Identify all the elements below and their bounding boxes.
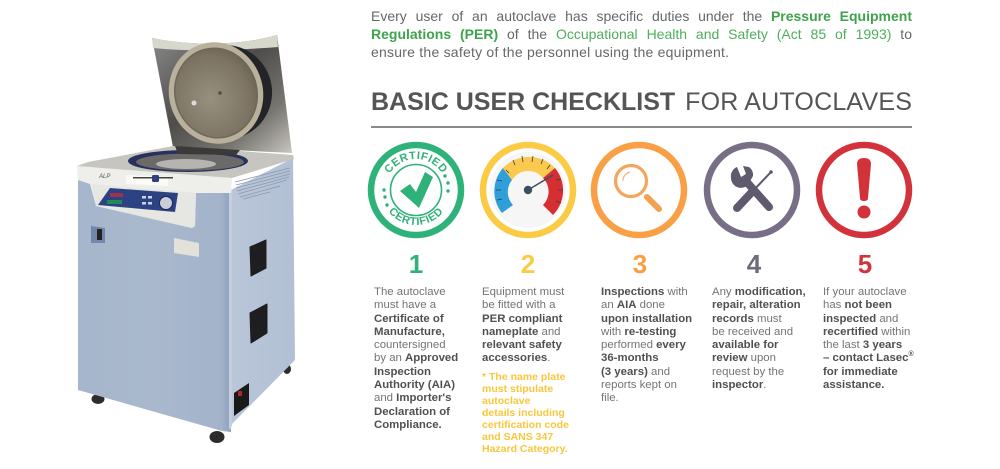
column 2 text: be fitted with a	[482, 299, 555, 311]
autoclave photo illustration	[77, 35, 295, 443]
column 3 text: (3 years) and	[601, 366, 670, 378]
column 3 text: Inspections with	[601, 286, 688, 298]
column 5 text	[823, 286, 914, 391]
deck	[77, 146, 294, 178]
icon: exclamation mark	[819, 145, 909, 235]
column 3 text: file.	[601, 392, 619, 404]
column 1 text: Certificate of	[374, 313, 444, 325]
body side	[231, 158, 295, 425]
column 2 note: * The name plate	[482, 371, 565, 383]
logo: ALP	[98, 174, 110, 180]
column 1 text: countersigned	[374, 339, 446, 351]
column 5 text: has not been	[823, 299, 892, 311]
column 2 note: must stipulate	[482, 383, 553, 395]
column 1 text: The autoclave	[374, 286, 446, 298]
lid gasket	[169, 35, 283, 149]
column 3 text: upon installation	[601, 313, 692, 325]
column 4 text: records must	[712, 313, 782, 325]
column 2 text	[482, 286, 564, 364]
chamber opening	[128, 146, 248, 172]
side vents	[235, 168, 290, 199]
column 2 text: PER compliant	[482, 313, 562, 325]
column 2 note: details including	[482, 407, 565, 419]
column 1 text: Inspection	[374, 366, 431, 378]
heading rule	[371, 126, 912, 128]
power box	[234, 383, 249, 416]
column 3 text: with re-testing	[601, 326, 676, 338]
card slot	[91, 226, 105, 243]
column 5 text: recertified within	[823, 326, 910, 338]
column 5 text: assistance.	[823, 379, 884, 391]
column 1 text: must have a	[374, 299, 436, 311]
icon: certified stamp: CERTIFIED	[385, 151, 446, 172]
intro paragraph: Regulations (PER) of the Occupational Health and Safety (Act 85 of 1993) to	[371, 26, 912, 42]
column 2 text: accessories.	[482, 352, 550, 364]
column 2 note	[482, 371, 569, 455]
intro paragraph: Every user of an autoclave has specific duties under the Pressure Equipment	[371, 8, 912, 24]
column 5 text: If your autoclave	[823, 286, 907, 298]
column 2 note: Hazard Category.	[482, 443, 568, 455]
number 2: 2	[521, 249, 535, 279]
icon: magnifying glass	[594, 145, 684, 235]
latch	[133, 175, 173, 182]
column 3 text	[601, 286, 692, 404]
column 2 note: and SANS 347	[482, 431, 553, 443]
column 3 text: an AIA done	[601, 299, 665, 311]
control display	[98, 188, 178, 212]
column 4 text: Any modification,	[712, 286, 806, 298]
number 5: 5	[858, 249, 872, 279]
column 4 text: request by the	[712, 366, 784, 378]
icon: certified stamp	[368, 142, 464, 238]
wheels	[92, 364, 291, 443]
column 1 text: by an Approved	[374, 352, 458, 364]
column 3 text: 36-months	[601, 352, 659, 364]
icon: pressure gauge	[483, 145, 573, 235]
column 2 text: nameplate and	[482, 326, 561, 338]
column 1 text: Manufacture,	[374, 326, 445, 338]
lid disk	[157, 32, 275, 154]
column 5 text: for immediate	[823, 366, 898, 378]
column 3 text: reports kept on	[601, 379, 677, 391]
intro paragraph: ensure the safety of the personnel using the equipment.	[371, 44, 729, 60]
column 2 text: Equipment must	[482, 286, 564, 298]
column 4 text: be received and	[712, 326, 793, 338]
number 1: 1	[409, 249, 423, 279]
open lid	[152, 32, 292, 154]
icon: certified stamp: CERTIFIED	[390, 208, 442, 225]
column 1 text: Compliance.	[374, 419, 442, 431]
column 1 text	[374, 286, 458, 431]
column 4 text	[712, 286, 806, 391]
column 1 text: Authority (AIA)	[374, 379, 455, 391]
column 2 note: autoclave	[482, 395, 530, 407]
heading: BASIC USER CHECKLIST FOR AUTOCLAVES	[371, 88, 912, 116]
number 4: 4	[747, 249, 761, 279]
rating label	[174, 238, 199, 257]
handles	[250, 240, 267, 343]
column 3 text: performed every	[601, 339, 686, 351]
column 4 text: available for	[712, 339, 778, 351]
column 5 text: inspected and	[823, 313, 898, 325]
column 5 text: – contact Lasec®	[823, 352, 914, 364]
number 3: 3	[633, 249, 647, 279]
column 1 text: Declaration of	[374, 406, 450, 418]
column 2 text: relevant safety	[482, 339, 562, 351]
intro paragraph	[371, 8, 912, 60]
column 5 text: the last 3 years	[823, 339, 902, 351]
column 4 text: repair, alteration	[712, 299, 801, 311]
column 4 text: review upon	[712, 352, 776, 364]
body front	[78, 180, 231, 432]
column 2 note: certification code	[482, 419, 569, 431]
icon: wrench and screwdriver	[707, 145, 797, 235]
column 1 text: and Importer's	[374, 392, 451, 404]
front white panel	[77, 166, 232, 228]
column 4 text: inspector.	[712, 379, 766, 391]
